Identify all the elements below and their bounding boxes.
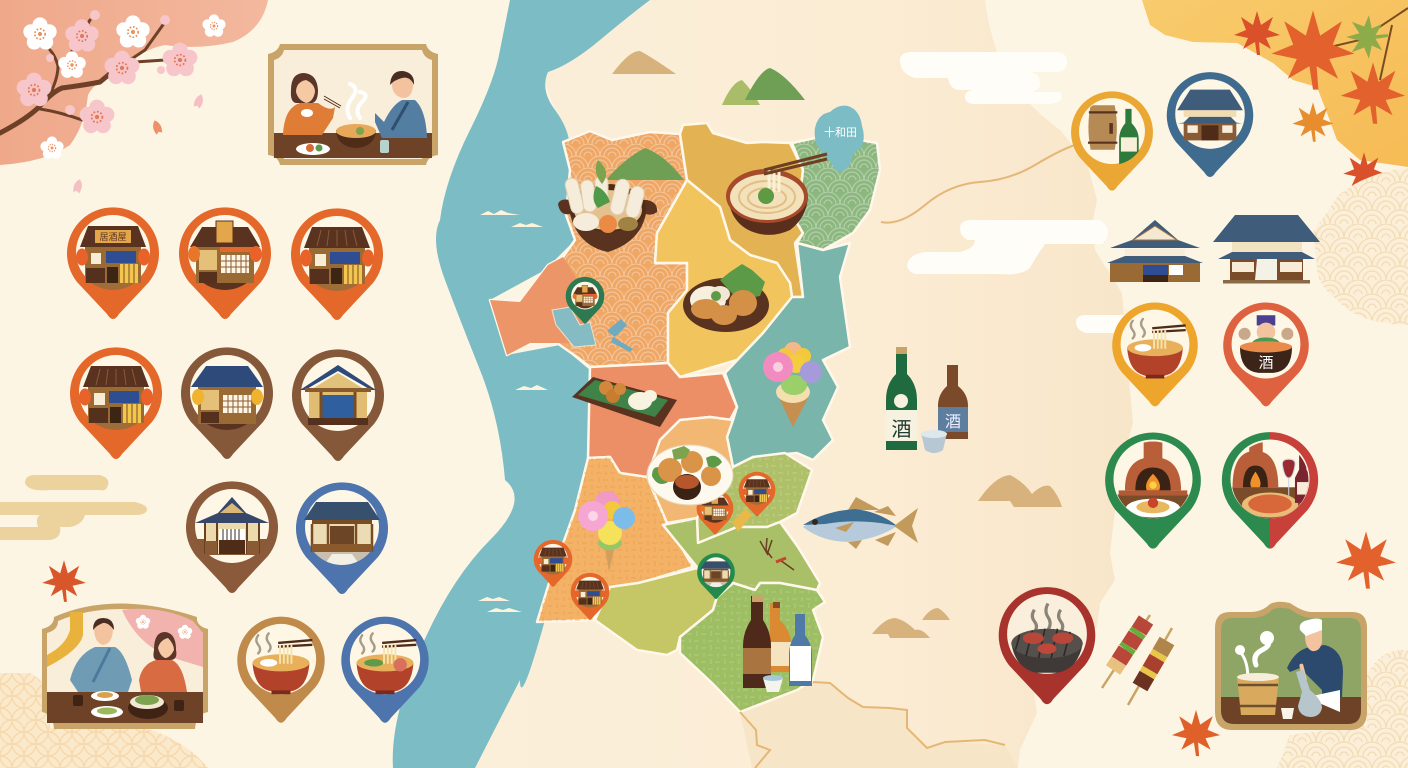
food: ice cream north <box>763 342 822 427</box>
sea wave marks <box>478 210 548 612</box>
temple house left <box>1107 220 1203 282</box>
tan hills south <box>872 608 950 638</box>
table <box>47 692 203 723</box>
pattern corner bottom left <box>0 673 208 768</box>
pink blossom <box>122 609 203 667</box>
small pin: Oga <box>566 277 604 324</box>
leaf: maple right <box>1336 531 1396 589</box>
maple leaves <box>1234 8 1408 192</box>
pin: ramen tan <box>237 617 325 723</box>
pin: ramen amber <box>1112 303 1198 406</box>
region: Oga peninsula <box>490 257 590 355</box>
cherry blossom branch <box>0 10 226 159</box>
region: north orange pattern <box>563 131 687 367</box>
pin brown <box>181 347 273 459</box>
pin blue temple <box>296 482 388 594</box>
region: salmon <box>588 363 737 477</box>
region texture <box>663 453 823 712</box>
pin: grill <box>999 587 1095 704</box>
food: wooden board <box>572 377 677 427</box>
folded fan <box>732 508 752 532</box>
pin: chef bowl <box>1223 303 1309 406</box>
steam <box>347 84 366 118</box>
pins: row 3 <box>186 481 388 594</box>
temple house right <box>1213 215 1320 284</box>
dishes <box>128 697 168 719</box>
pin: oven pizza <box>1222 432 1318 549</box>
frame: couple eating, top <box>268 44 438 165</box>
region: lime north <box>697 453 812 543</box>
small pin: green <box>697 553 735 599</box>
pin 2 <box>179 207 271 319</box>
small autumn mark <box>760 538 794 570</box>
pin: chef bowl: 酒 <box>1259 354 1274 371</box>
woman <box>139 632 187 692</box>
leaf: maple bottom <box>1172 710 1220 756</box>
region: gold north <box>680 123 803 297</box>
table <box>274 133 432 158</box>
tan hills east <box>978 475 1062 507</box>
tan mountains <box>612 51 1062 638</box>
fish <box>803 497 918 549</box>
frame: chef cooking, bottom right <box>1215 602 1367 730</box>
lake label: 十和田 <box>824 125 857 139</box>
autumn corner blob <box>1142 0 1408 167</box>
small pin: coast 1 <box>534 540 572 587</box>
pin: sake barrel <box>1071 91 1153 191</box>
pin: oven pasta <box>1105 433 1201 549</box>
sake bottles center: 酒 <box>892 418 912 441</box>
border route lines <box>740 145 1075 768</box>
food: plate of fried dish <box>683 264 769 332</box>
man <box>375 71 427 138</box>
plate <box>296 143 330 155</box>
region: lime central <box>663 518 820 597</box>
sake bottles center: 酒 <box>945 413 961 431</box>
man <box>70 618 132 692</box>
region: green north-east pattern <box>792 138 880 250</box>
green mountains top <box>722 68 805 105</box>
pattern corner right <box>1313 167 1408 325</box>
lake Towada <box>815 106 864 172</box>
yellow post <box>47 612 83 667</box>
region: olive south <box>595 568 717 655</box>
land mass <box>470 0 1133 768</box>
chef <box>1287 618 1343 712</box>
pin brown shrine <box>292 349 384 461</box>
leaf: maple left <box>42 560 86 602</box>
wooden tub <box>1237 677 1279 715</box>
pin: blue temple top <box>1167 72 1253 177</box>
bowl <box>336 130 376 148</box>
food: plate with karaage <box>647 445 733 505</box>
steam <box>1240 640 1269 680</box>
region: yellow central <box>655 180 792 377</box>
region: map regions <box>490 123 880 712</box>
green mountain in north orange <box>606 148 684 180</box>
region: teal <box>725 243 850 467</box>
pins: orange izakaya row 1 <box>67 207 383 320</box>
small pin: orange <box>697 490 733 534</box>
region: green south <box>680 583 825 712</box>
food: ice cream south <box>578 491 635 572</box>
sake bottles center <box>886 347 968 453</box>
table <box>1221 697 1361 724</box>
clouds <box>900 52 1125 333</box>
falling petals <box>72 93 205 194</box>
cup <box>1281 708 1294 719</box>
woman <box>283 73 341 135</box>
region: south orange pattern <box>537 457 693 622</box>
yakitori skewers <box>1102 615 1172 705</box>
land south of border <box>740 682 1018 768</box>
region: patterned tan <box>647 417 735 523</box>
food: ramen bowl <box>726 154 827 235</box>
small pin: coast 2 <box>571 573 609 620</box>
region: green north-east <box>792 138 880 250</box>
region: south orange <box>537 457 693 622</box>
sake bottles south <box>743 595 812 692</box>
small water marks <box>607 319 633 352</box>
small pin: orange east <box>739 472 775 516</box>
cherry corner blob <box>0 0 268 165</box>
pattern corner bottom right <box>1277 650 1408 768</box>
pin: ramen blue <box>341 617 429 723</box>
pins: row 2 <box>70 347 384 461</box>
frame: couple eating, bottom left <box>42 604 208 729</box>
sea <box>393 0 650 768</box>
tan cloud left <box>0 475 147 540</box>
sake bottle glass <box>1296 670 1322 717</box>
pin 3 <box>291 208 383 320</box>
food: kiritanpo hotpot <box>558 160 657 252</box>
lagoon Hachirogata <box>552 307 596 347</box>
